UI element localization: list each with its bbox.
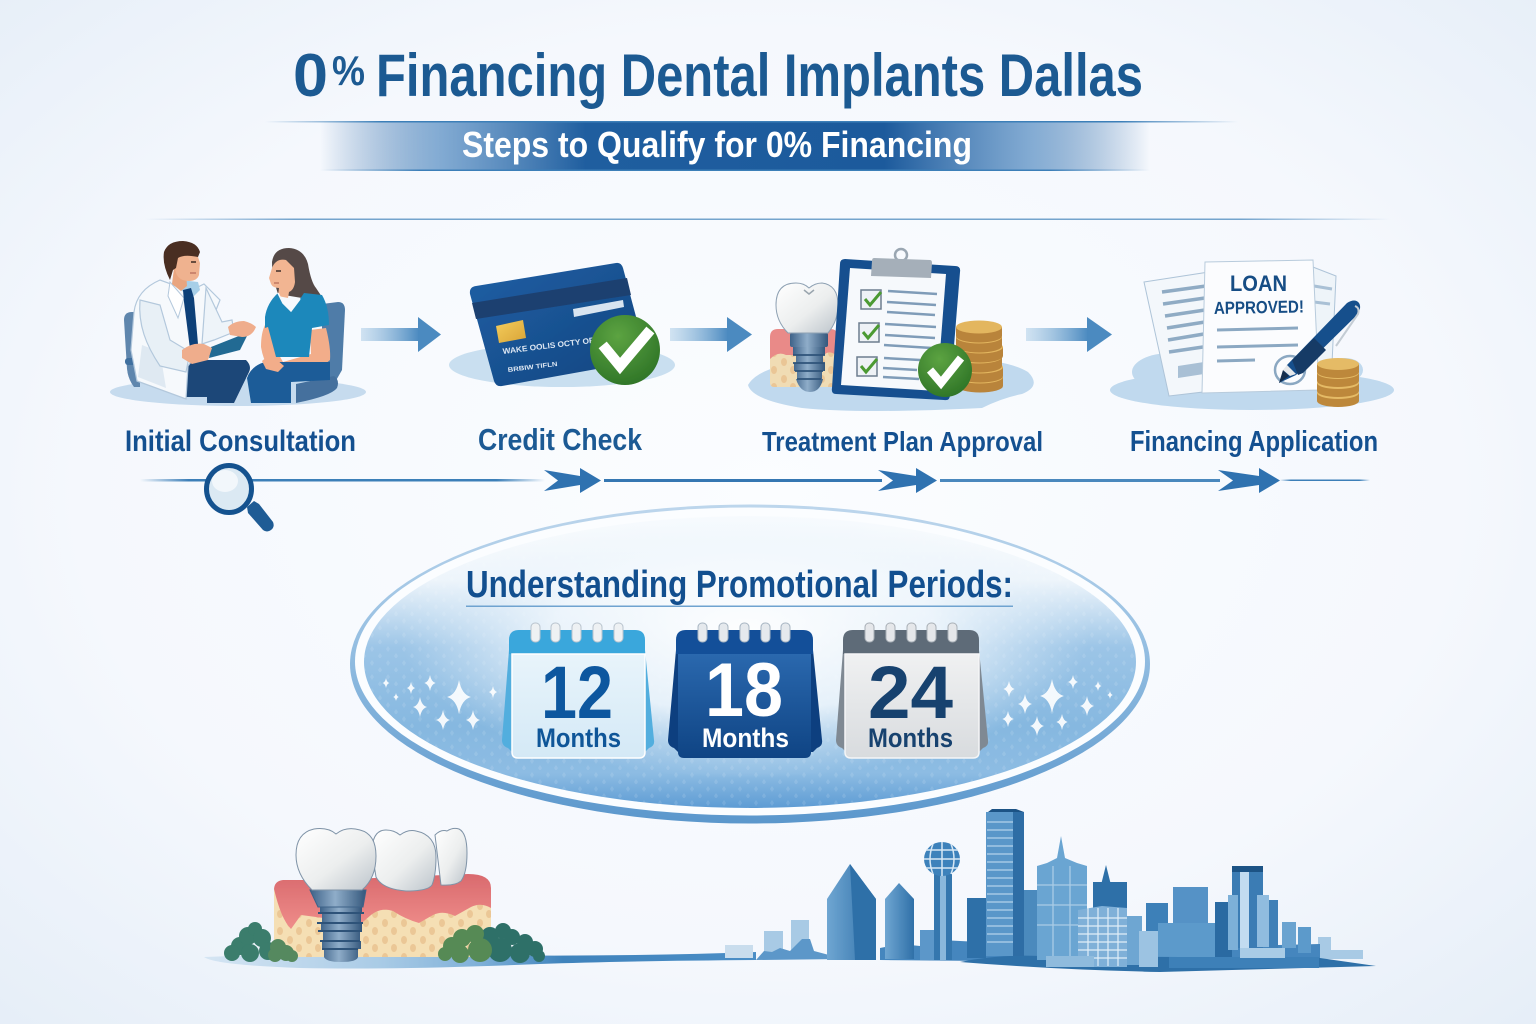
dallas skyline [725, 809, 1376, 972]
card [470, 263, 646, 386]
implant [790, 333, 828, 392]
right tower [1228, 866, 1269, 950]
back documents [1144, 262, 1336, 396]
calendar: 24 months [836, 623, 988, 758]
checklist row 2 [859, 323, 936, 348]
ground swoosh [204, 952, 756, 968]
calendar: 24 months: Months [868, 723, 953, 753]
sparkles right [1002, 675, 1113, 736]
tall tower [986, 809, 1024, 956]
clipboard [832, 249, 960, 400]
title: 0 [293, 42, 328, 109]
timeline arrow 3 [1218, 468, 1280, 493]
step 4 label: Financing Application [1130, 426, 1378, 458]
subtitle banner [265, 121, 1238, 171]
card: WAKE OOLIS OCTY OF [502, 336, 595, 356]
left bushes [224, 922, 298, 962]
calendar: 12 months [502, 623, 654, 758]
spire building [1037, 836, 1087, 960]
timeline [140, 468, 1370, 493]
sparkles left [382, 675, 497, 730]
patient [247, 248, 330, 403]
icon: magnifying glass [206, 466, 274, 532]
step 1: initial consultation illustration [110, 241, 366, 406]
grid building [1078, 906, 1158, 967]
pen [1279, 300, 1360, 383]
back tooth [435, 828, 467, 885]
step 4: loan approved illustration [1110, 260, 1394, 410]
calendar: 18 months [668, 623, 822, 758]
step 1 label: Initial Consultation [125, 425, 356, 458]
coins stack [956, 320, 1003, 392]
podium buildings [1046, 948, 1319, 968]
reunion tower [924, 842, 960, 960]
pyramid tower [827, 864, 876, 960]
bone [274, 890, 491, 957]
card: BRBIW TIFLN [507, 361, 558, 374]
gum and bone [770, 329, 838, 387]
calendar: 18 months: Months [702, 723, 789, 753]
dental implant illustration [224, 828, 545, 963]
front tooth [296, 829, 376, 890]
implant screw [310, 890, 366, 962]
checklist row 3 [857, 357, 920, 379]
checklist row 1 [861, 290, 937, 315]
right chair [296, 302, 345, 403]
loan approved paper: APPROVED! [1214, 296, 1304, 318]
title: Financing Dental Implants Dallas [376, 42, 1143, 109]
step 2: credit card illustration [449, 263, 675, 387]
subtitle text: Steps to Qualify for 0% Financing [462, 124, 972, 165]
loan approved paper: LOAN [1230, 271, 1287, 296]
calendar: 18 months: 18 [705, 648, 783, 733]
mid buildings [920, 865, 1376, 972]
calendar: 12 months: Months [536, 723, 621, 753]
panel: promotional periods oval [350, 486, 1150, 824]
right bushes [438, 923, 545, 963]
green check badge [590, 315, 660, 385]
arrow 2 [670, 317, 752, 352]
timeline arrow 2 [878, 468, 937, 493]
step 3 label: Treatment Plan Approval [762, 426, 1043, 457]
second tower [885, 883, 914, 959]
tooth [776, 283, 838, 333]
title: % [332, 47, 365, 94]
arrow 3 [1026, 317, 1112, 352]
gum [274, 874, 491, 929]
green check badge [918, 343, 972, 397]
step 3: treatment plan illustration [748, 249, 1034, 411]
arrow 1 [361, 317, 441, 352]
timeline arrow 1 [544, 468, 601, 493]
loan approved paper [1202, 260, 1319, 393]
calendar: 12 months: 12 [541, 651, 613, 734]
coins stack [1317, 358, 1359, 407]
panel heading: Understanding Promotional Periods: [466, 564, 1013, 606]
low base buildings [880, 940, 1320, 964]
doctor [131, 241, 256, 403]
left chair [124, 312, 149, 387]
step 2 label: Credit Check [478, 422, 643, 457]
far buildings [725, 920, 1363, 959]
middle tooth [372, 830, 436, 891]
calendar: 24 months: 24 [868, 651, 953, 734]
